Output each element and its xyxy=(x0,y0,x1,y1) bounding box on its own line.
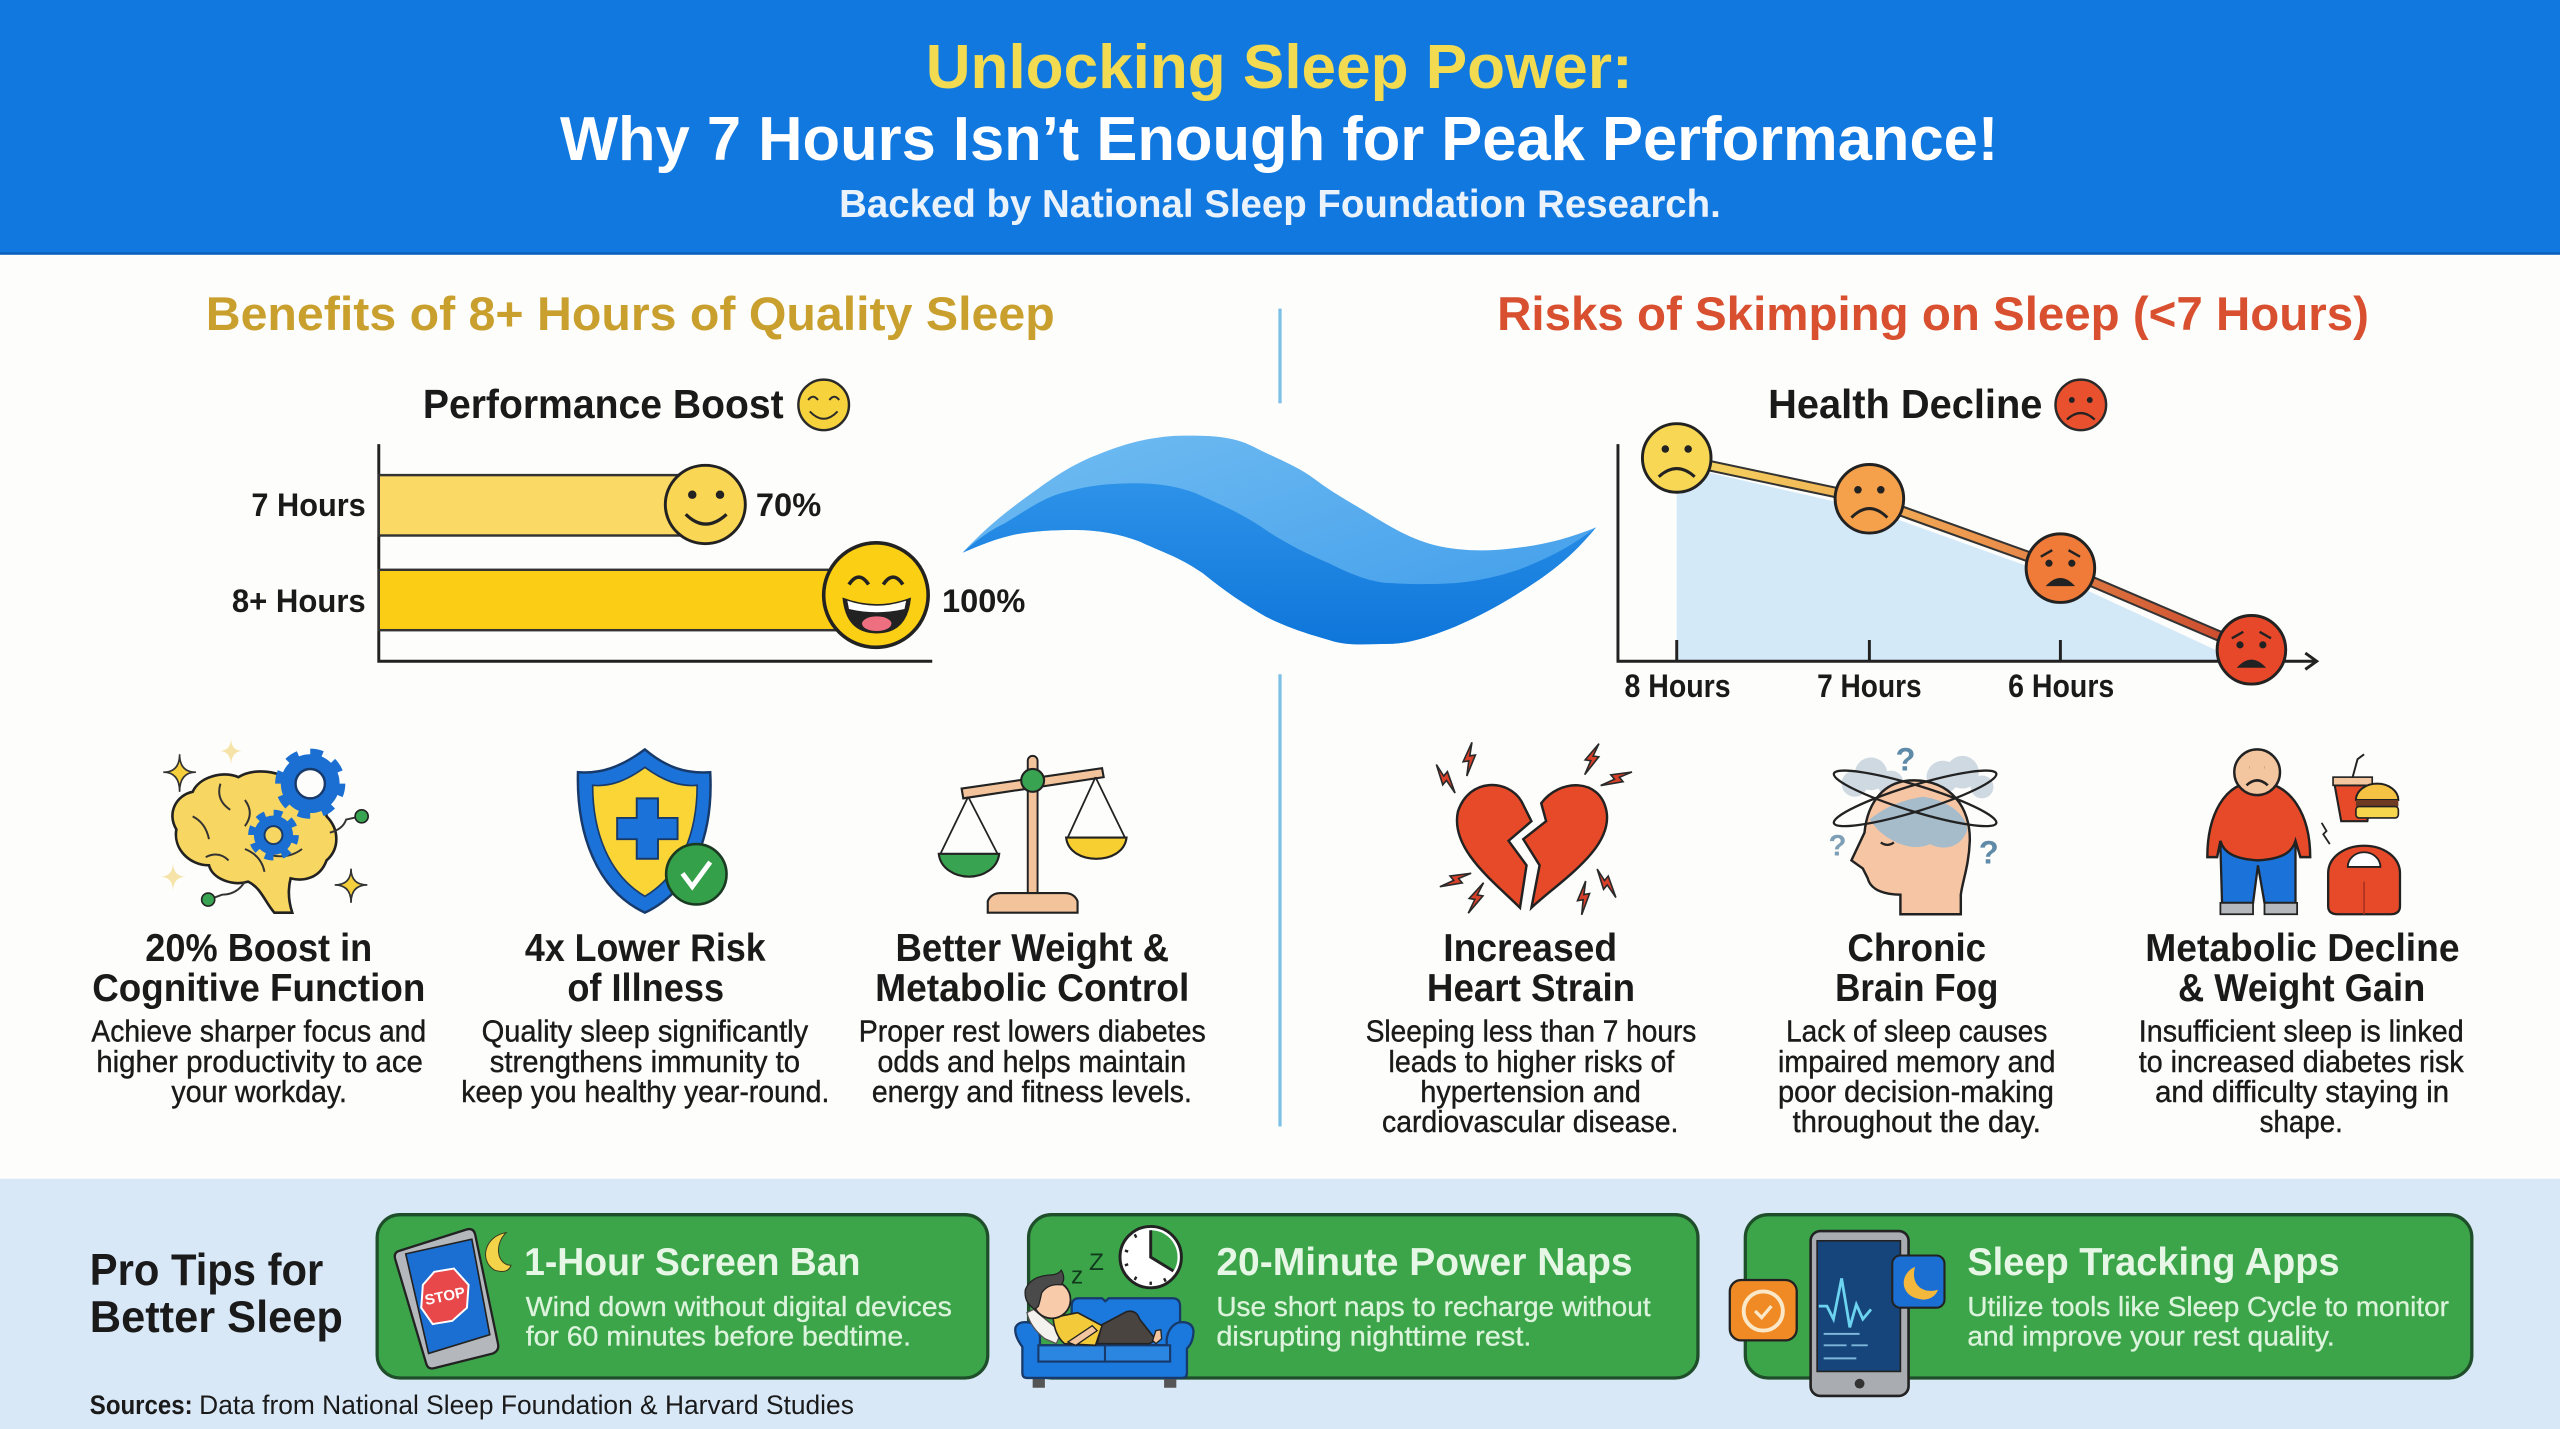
description xyxy=(1778,1016,2056,1139)
heading: Chronic xyxy=(1847,927,1986,970)
icon: smiling face xyxy=(798,380,849,430)
description xyxy=(2139,1016,2465,1139)
bar: 8+ hours xyxy=(379,570,844,630)
description: to increased diabetes risk xyxy=(2139,1046,2465,1079)
tip text: disrupting nighttime rest. xyxy=(1216,1320,1531,1351)
icon: balance scale xyxy=(939,756,1127,913)
tip text: for 60 minutes before bedtime. xyxy=(526,1320,911,1351)
tip text xyxy=(526,1291,952,1351)
benefit: lower illness risk xyxy=(461,749,829,1109)
description: odds and helps maintain xyxy=(878,1046,1186,1079)
description: your workday. xyxy=(171,1076,347,1109)
center wave xyxy=(963,436,1596,644)
benefit: weight control xyxy=(859,756,1206,1109)
pro tips heading: Better Sleep xyxy=(90,1291,343,1342)
title line one: Unlocking Sleep Power: xyxy=(926,33,1633,102)
description: energy and fitness levels. xyxy=(872,1076,1192,1109)
icon: foggy head: ? xyxy=(1896,741,1915,778)
value: 70%: 70% xyxy=(756,486,821,523)
icon: brain with gears xyxy=(160,738,368,913)
chart title: Health Decline xyxy=(1768,381,2042,427)
description: impaired memory and xyxy=(1778,1046,2056,1079)
label: 7 hours: 7 Hours xyxy=(251,486,366,523)
chart title: Performance Boost xyxy=(423,381,784,427)
icon: phone with stop sign xyxy=(395,1229,511,1368)
icon: napping person with clock xyxy=(1015,1226,1193,1388)
chart: performance boost bars xyxy=(232,380,1025,661)
description: Insufficient sleep is linked xyxy=(2139,1016,2464,1049)
description: shape. xyxy=(2260,1106,2343,1139)
face: content xyxy=(665,465,745,544)
icon: foggy head: ? xyxy=(1979,834,1999,871)
face: 6 hours xyxy=(2026,534,2095,602)
icon: person with fast food and scale xyxy=(2207,749,2400,914)
heading: risks: Risks of Skimping on Sleep (<7 Hours) xyxy=(1497,288,2369,341)
heading: Better Weight & xyxy=(896,927,1169,970)
heading xyxy=(875,927,1189,1010)
tip text xyxy=(1967,1291,2449,1351)
benefit: cognitive function xyxy=(91,738,426,1109)
tip card: power naps xyxy=(1015,1215,1698,1388)
heading: of Illness xyxy=(567,967,724,1010)
heading: & Weight Gain xyxy=(2178,967,2425,1010)
tip heading: Sleep Tracking Apps xyxy=(1967,1241,2340,1284)
face: below 6 hours xyxy=(2217,616,2286,684)
tip heading: 1-Hour Screen Ban xyxy=(524,1241,860,1284)
face: 7 hours xyxy=(1835,464,1904,533)
tip text xyxy=(1216,1291,1651,1351)
tip text: Use short naps to recharge without xyxy=(1216,1291,1651,1322)
axis label: 8 hours: 8 Hours xyxy=(1624,667,1731,704)
tip text: and improve your rest quality. xyxy=(1967,1320,2335,1351)
description: Quality sleep significantly xyxy=(482,1016,809,1049)
heading xyxy=(1427,927,1635,1010)
icon: napping person with clock: Z xyxy=(1089,1249,1104,1276)
title line two: Why 7 Hours Isn’t Enough for Peak Performance! xyxy=(560,105,1998,174)
axis label: 6 hours: 6 Hours xyxy=(2008,667,2114,704)
icon: napping person with clock: z xyxy=(1071,1262,1083,1289)
pro tips heading xyxy=(90,1244,343,1342)
heading: Increased xyxy=(1443,927,1617,970)
heading xyxy=(525,927,766,1010)
risk: weight gain xyxy=(2139,749,2465,1139)
heading: Brain Fog xyxy=(1835,967,1998,1010)
tip text: Wind down without digital devices xyxy=(526,1291,952,1322)
description: leads to higher risks of xyxy=(1389,1046,1675,1079)
axis label: 7 hours: 7 Hours xyxy=(1817,667,1922,704)
risk: brain fog xyxy=(1778,741,2056,1139)
icon: phone with heartbeat xyxy=(1730,1231,1944,1396)
risk: heart strain xyxy=(1366,742,1696,1139)
icon: broken heart xyxy=(1429,742,1633,915)
chart: health decline line xyxy=(1618,380,2317,704)
sources note: Sources: xyxy=(90,1390,193,1420)
description: poor decision-making xyxy=(1778,1076,2054,1109)
face: laughing xyxy=(824,543,928,647)
description: and difficulty staying in xyxy=(2155,1076,2449,1109)
description: hypertension and xyxy=(1420,1076,1641,1109)
description: keep you healthy year-round. xyxy=(461,1076,829,1109)
icon: phone with stop sign: STOP xyxy=(423,1285,467,1309)
panel: pro tips xyxy=(0,1179,2560,1429)
header banner xyxy=(0,0,2560,255)
icon: foggy head xyxy=(1829,741,2000,914)
value: 100%: 100% xyxy=(942,582,1025,619)
icon: foggy head: ? xyxy=(1829,830,1847,863)
description xyxy=(461,1016,829,1109)
description: strengthens immunity to xyxy=(490,1046,800,1079)
heading: 4x Lower Risk xyxy=(525,927,766,970)
heading: Cognitive Function xyxy=(92,967,425,1010)
heading: 20% Boost in xyxy=(145,927,372,970)
pro tips heading: Pro Tips for xyxy=(90,1244,323,1295)
description: throughout the day. xyxy=(1793,1106,2041,1139)
description xyxy=(1366,1016,1696,1139)
tip card: tracking apps xyxy=(1730,1215,2472,1396)
description: Sleeping less than 7 hours xyxy=(1366,1016,1696,1049)
heading xyxy=(1835,927,1998,1010)
heading xyxy=(92,927,425,1010)
heading: benefits: Benefits of 8+ Hours of Quality Sleep xyxy=(206,288,1055,341)
label: 8+ hours: 8+ Hours xyxy=(232,582,366,619)
subtitle: Backed by National Sleep Foundation Research. xyxy=(839,183,1721,226)
heading: Metabolic Control xyxy=(875,967,1189,1010)
icon: frowning face xyxy=(2056,380,2106,430)
tip heading: 20-Minute Power Naps xyxy=(1216,1241,1633,1284)
description xyxy=(91,1016,426,1109)
center divider xyxy=(1279,309,1281,1127)
description: Lack of sleep causes xyxy=(1786,1016,2047,1049)
heading: Metabolic Decline xyxy=(2145,927,2460,970)
heading xyxy=(2145,927,2460,1010)
tip text: Utilize tools like Sleep Cycle to monitor xyxy=(1967,1291,2449,1322)
tip card: screen ban xyxy=(377,1215,988,1378)
description: Achieve sharper focus and xyxy=(91,1016,426,1049)
area under the line xyxy=(1677,465,2240,661)
description: cardiovascular disease. xyxy=(1382,1106,1678,1139)
decline line xyxy=(1677,459,2251,650)
icon: shield with cross xyxy=(578,749,727,913)
bar: 7 hours xyxy=(379,475,689,536)
sources note: Data from National Sleep Foundation & Harvard Studies xyxy=(199,1390,854,1420)
description: Proper rest lowers diabetes xyxy=(859,1016,1206,1049)
description: higher productivity to ace xyxy=(96,1046,423,1079)
face: 8 hours xyxy=(1642,424,1711,492)
heading: Heart Strain xyxy=(1427,967,1635,1010)
description xyxy=(859,1016,1206,1109)
